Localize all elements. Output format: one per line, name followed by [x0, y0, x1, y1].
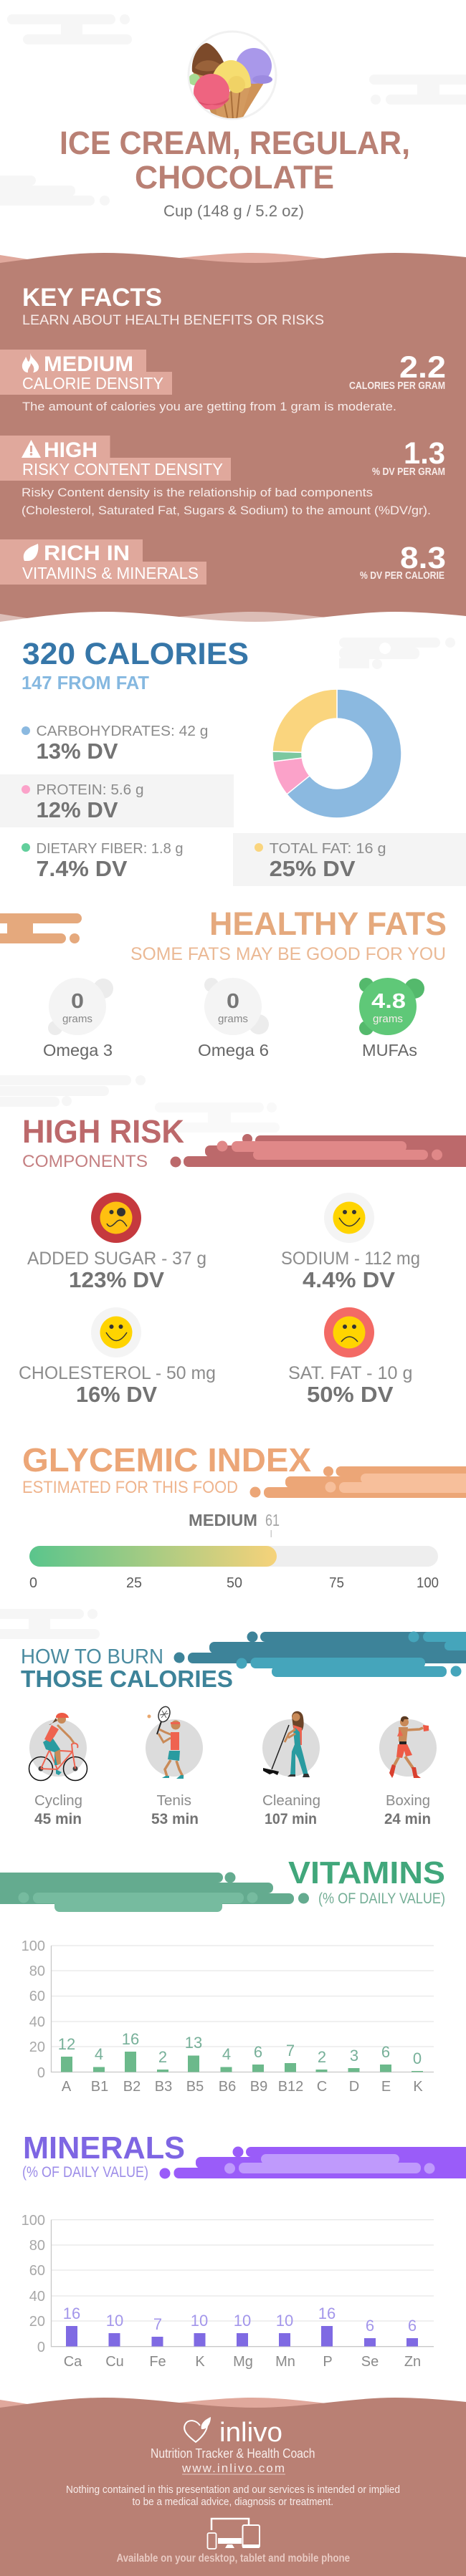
tagline: Nutrition Tracker & Health Coach [151, 2446, 315, 2461]
item: omega 6: grams [218, 1013, 248, 1025]
header band [0, 913, 82, 943]
bar chart: vitamins: 4 [95, 2045, 103, 2063]
bar chart: vitamins: B12 [278, 2079, 303, 2095]
header section [0, 14, 466, 220]
item: mufas: 4.8 [371, 990, 406, 1013]
item: saturated fat: SAT. FAT - 10 g [288, 1363, 413, 1383]
item: saturated fat: 50% DV [307, 1382, 394, 1407]
bar chart: vitamins: 100 [22, 1938, 45, 1954]
panel: key facts [0, 253, 466, 645]
icon: warning triangle [22, 440, 41, 458]
bar chart: minerals: Fe [149, 2354, 166, 2370]
heading: those calories: THOSE CALORIES [21, 1666, 233, 1692]
subheading: (% OF DAILY VALUE) [318, 1890, 445, 1907]
activity labels: 107 min [265, 1811, 317, 1827]
panel: how to burn those calories [0, 1609, 466, 1827]
bar chart: vitamins: C [317, 2079, 327, 2095]
gauge scale: 75 [329, 1575, 344, 1591]
fact: risky content density [0, 436, 445, 517]
image: ice cream cones [189, 32, 276, 122]
logo: inlivo [184, 2417, 282, 2448]
legend: carbohydrates [22, 724, 208, 764]
legend: protein [0, 774, 234, 827]
heading: healthy fats: HEALTHY FATS [209, 905, 447, 942]
fact: calorie density: CALORIES PER GRAM [349, 380, 445, 392]
bar chart: minerals: K [195, 2354, 205, 2370]
heading: vitamins: VITAMINS [288, 1855, 445, 1890]
bar chart: vitamins: 6 [254, 2043, 262, 2061]
subheading: SOME FATS MAY BE GOOD FOR YOU [130, 944, 446, 964]
legend: carbohydrates: 13% DV [36, 739, 118, 764]
fact: calorie density: 2.2 [399, 350, 446, 385]
bar chart: minerals: 7 [153, 2315, 162, 2333]
subheading: from fat: 147 FROM FAT [22, 672, 149, 693]
bar chart: minerals: 20 [29, 2314, 45, 2330]
bar chart: minerals: 16 [318, 2305, 336, 2322]
bar chart: vitamins: 2 [158, 2048, 167, 2066]
fact: risky content density: Risky Content density is the relationship of bad components [22, 486, 373, 499]
fact: risky content density: RISKY CONTENT DENSITY [22, 460, 223, 479]
item: sodium [281, 1193, 420, 1292]
activity labels: 53 min [151, 1811, 199, 1827]
gauge scale: 50 [227, 1575, 242, 1591]
bar chart: minerals: 10 [191, 2312, 208, 2330]
bar chart: minerals: 10 [276, 2312, 293, 2330]
item: mufas: grams [373, 1013, 403, 1025]
item: cholesterol [19, 1307, 216, 1407]
disclaimer: Nothing contained in this presentation and our services is intended or implied [66, 2484, 400, 2496]
heading: key facts: KEY FACTS [22, 284, 162, 312]
header band [249, 1466, 466, 1498]
legend: total fat: 25% DV [270, 856, 356, 881]
bar chart: vitamins: B3 [155, 2079, 172, 2095]
bar chart: vitamins: 13 [185, 2034, 202, 2052]
fact: rich in vitamins and minerals: VITAMINS & MINERALS [22, 564, 199, 582]
bar chart: vitamins: 0 [37, 2065, 45, 2081]
fact: rich in vitamins and minerals: 8.3 [400, 541, 446, 575]
bar chart: minerals: P [323, 2354, 333, 2370]
activity labels: Cycling [34, 1793, 82, 1809]
fact: risky content density: HIGH [44, 438, 98, 462]
item: sodium: SODIUM - 112 mg [281, 1249, 420, 1269]
legend: dietary fiber [22, 841, 184, 881]
bar chart: minerals: Mn [275, 2354, 295, 2370]
bar chart: vitamins: B2 [123, 2079, 141, 2095]
activity: cleaning [262, 1711, 320, 1777]
donut chart [272, 689, 401, 818]
heading: high risk: HIGH RISK [22, 1113, 184, 1150]
bar chart: minerals: 6 [408, 2317, 417, 2335]
bar chart: vitamins: 7 [286, 2042, 295, 2060]
fact: rich in vitamins and minerals: RICH IN [44, 542, 130, 565]
bar chart: vitamins: 16 [122, 2030, 139, 2048]
bar chart: minerals: 80 [29, 2238, 45, 2254]
heading: how to burn: HOW TO BURN [21, 1645, 163, 1668]
item: sodium: 4.4% DV [303, 1267, 395, 1292]
item: mufas: MUFAs [362, 1041, 417, 1059]
gauge scale: 25 [126, 1575, 142, 1591]
subheading: ESTIMATED FOR THIS FOOD [22, 1478, 238, 1497]
bar chart: vitamins: E [381, 2079, 391, 2095]
heading: minerals: MINERALS [23, 2130, 185, 2166]
bar chart: vitamins: B5 [186, 2079, 204, 2095]
bar chart: vitamins: D [349, 2079, 359, 2095]
heading: calories: 320 CALORIES [22, 637, 249, 671]
bar chart: minerals: 10 [234, 2312, 251, 2330]
item: omega 6: 0 [227, 990, 239, 1013]
panel: glycemic index [22, 1441, 466, 1591]
bar chart: minerals: Mg [233, 2354, 253, 2370]
gauge bar [29, 1546, 438, 1567]
legend: protein: 12% DV [36, 797, 118, 822]
bar chart: vitamins: 2 [318, 2048, 326, 2066]
panel: footer [0, 2398, 466, 2576]
activity: cycling [29, 1713, 87, 1781]
activity labels: Tenis [156, 1793, 191, 1809]
item: added sugar [27, 1193, 206, 1292]
disclaimer [66, 2484, 400, 2508]
bar chart: vitamins: B6 [219, 2079, 236, 2095]
bar chart: vitamins: 0 [413, 2049, 422, 2067]
bar chart: vitamins: K [413, 2079, 423, 2095]
header band [173, 1632, 466, 1677]
panel: calories [0, 637, 466, 886]
item: mufas [359, 978, 424, 1059]
activity labels: 24 min [384, 1811, 431, 1827]
legend: protein: PROTEIN: 5.6 g [36, 782, 143, 798]
bar chart: minerals: 16 [63, 2305, 80, 2322]
item: omega 3: 0 [71, 990, 84, 1013]
panel: healthy fats [0, 905, 447, 1059]
icon: flame [22, 353, 39, 373]
bar chart: vitamins: A [62, 2079, 72, 2095]
activity labels: 45 min [34, 1811, 82, 1827]
item: omega 6: Omega 6 [198, 1041, 269, 1059]
gauge scale: 0 [29, 1575, 37, 1591]
bar chart: minerals: Cu [105, 2354, 124, 2370]
fact: calorie density: MEDIUM [44, 352, 133, 376]
title [60, 125, 410, 196]
title: ICE CREAM, REGULAR, [60, 125, 410, 161]
legend: total fat [233, 833, 466, 886]
activity: tennis [146, 1705, 203, 1779]
bar chart: vitamins: 4 [222, 2045, 231, 2063]
bar chart: vitamins: 3 [350, 2047, 358, 2065]
bar chart: minerals: 60 [29, 2263, 45, 2279]
activity labels [34, 1793, 431, 1827]
bar chart: vitamins: B9 [250, 2079, 267, 2095]
disclaimer: to be a medical advice, diagnosis or treatment. [132, 2496, 333, 2508]
bar chart: vitamins: 6 [381, 2043, 390, 2061]
title: CHOCOLATE [135, 159, 334, 196]
value label: MEDIUM [189, 1511, 257, 1529]
bar chart: vitamins: 20 [29, 2039, 45, 2055]
legend: carbohydrates: CARBOHYDRATES: 42 g [36, 724, 208, 739]
logo: inlivo: inlivo [219, 2418, 282, 2448]
activity labels: Boxing [386, 1793, 430, 1809]
bar chart: vitamins: 40 [29, 2014, 45, 2030]
fact: risky content density: % DV PER GRAM [372, 466, 445, 478]
serving size: Cup (148 g / 5.2 oz) [163, 202, 304, 220]
bar chart: vitamins: 60 [29, 1989, 45, 2004]
fact: calorie density: The amount of calories you are getting from 1 gram is moderate. [22, 400, 396, 413]
bar chart: minerals: Se [361, 2354, 379, 2370]
fact: rich in vitamins and minerals [0, 539, 446, 585]
bar chart: minerals: 10 [106, 2312, 123, 2330]
bar chart: vitamins [22, 1938, 434, 2095]
item: omega 3 [43, 978, 113, 1059]
panel: minerals [22, 2130, 466, 2370]
website link: www.inlivo.com [181, 2461, 285, 2475]
bar chart: minerals: Ca [64, 2354, 82, 2370]
panel: vitamins [0, 1855, 445, 2095]
item: saturated fat [288, 1307, 413, 1407]
value label [189, 1511, 280, 1537]
subheading: components: COMPONENTS [22, 1152, 148, 1171]
subheading: (% OF DAILY VALUE) [22, 2164, 148, 2181]
fact: calorie density: CALORIE DENSITY [22, 374, 163, 393]
availability note: Available on your desktop, tablet and mobile phone [116, 2552, 350, 2565]
bar chart: vitamins: 12 [58, 2035, 75, 2053]
bar chart: minerals: 100 [22, 2213, 45, 2229]
item: added sugar: 123% DV [69, 1267, 164, 1292]
subheading: LEARN ABOUT HEALTH BENEFITS OR RISKS [22, 313, 324, 328]
legend: total fat: TOTAL FAT: 16 g [270, 841, 386, 857]
legend: dietary fiber: 7.4% DV [36, 856, 128, 881]
value label: 61 [265, 1511, 280, 1529]
item: added sugar: ADDED SUGAR - 37 g [27, 1249, 206, 1269]
bar chart: minerals [22, 2213, 434, 2370]
fact: calorie density [0, 350, 446, 413]
icon: leaf [24, 544, 38, 561]
item: omega 6 [198, 978, 269, 1059]
fact: risky content density: 1.3 [404, 436, 445, 471]
item: cholesterol: CHOLESTEROL - 50 mg [19, 1363, 216, 1383]
bar chart: minerals: 40 [29, 2289, 45, 2305]
header band [0, 1873, 309, 1912]
bar chart: minerals: Zn [404, 2354, 421, 2370]
bar chart: minerals: 6 [366, 2317, 374, 2335]
gauge scale: 100 [417, 1575, 439, 1591]
header band [159, 2146, 466, 2179]
item: omega 3: Omega 3 [43, 1041, 113, 1059]
activity labels: Cleaning [262, 1793, 320, 1809]
heading: glycemic index: GLYCEMIC INDEX [22, 1441, 311, 1479]
gauge scale [29, 1575, 439, 1591]
icon: devices [208, 2519, 260, 2549]
fact: risky content density: (Cholesterol, Saturated Fat, Sugars & Sodium) to the amount (%DV/gr). [22, 504, 431, 517]
bar chart: vitamins: 80 [29, 1964, 45, 1979]
bar chart: minerals: 0 [37, 2340, 45, 2355]
legend: dietary fiber: DIETARY FIBER: 1.8 g [36, 841, 184, 857]
activity: boxing [379, 1716, 437, 1778]
bar chart: vitamins: B1 [91, 2079, 108, 2095]
fact: rich in vitamins and minerals: % DV PER CALORIE [360, 570, 444, 582]
item: cholesterol: 16% DV [76, 1382, 157, 1407]
panel: high risk components [0, 1075, 466, 1407]
header band [171, 1134, 466, 1168]
item: omega 3: grams [62, 1013, 92, 1025]
